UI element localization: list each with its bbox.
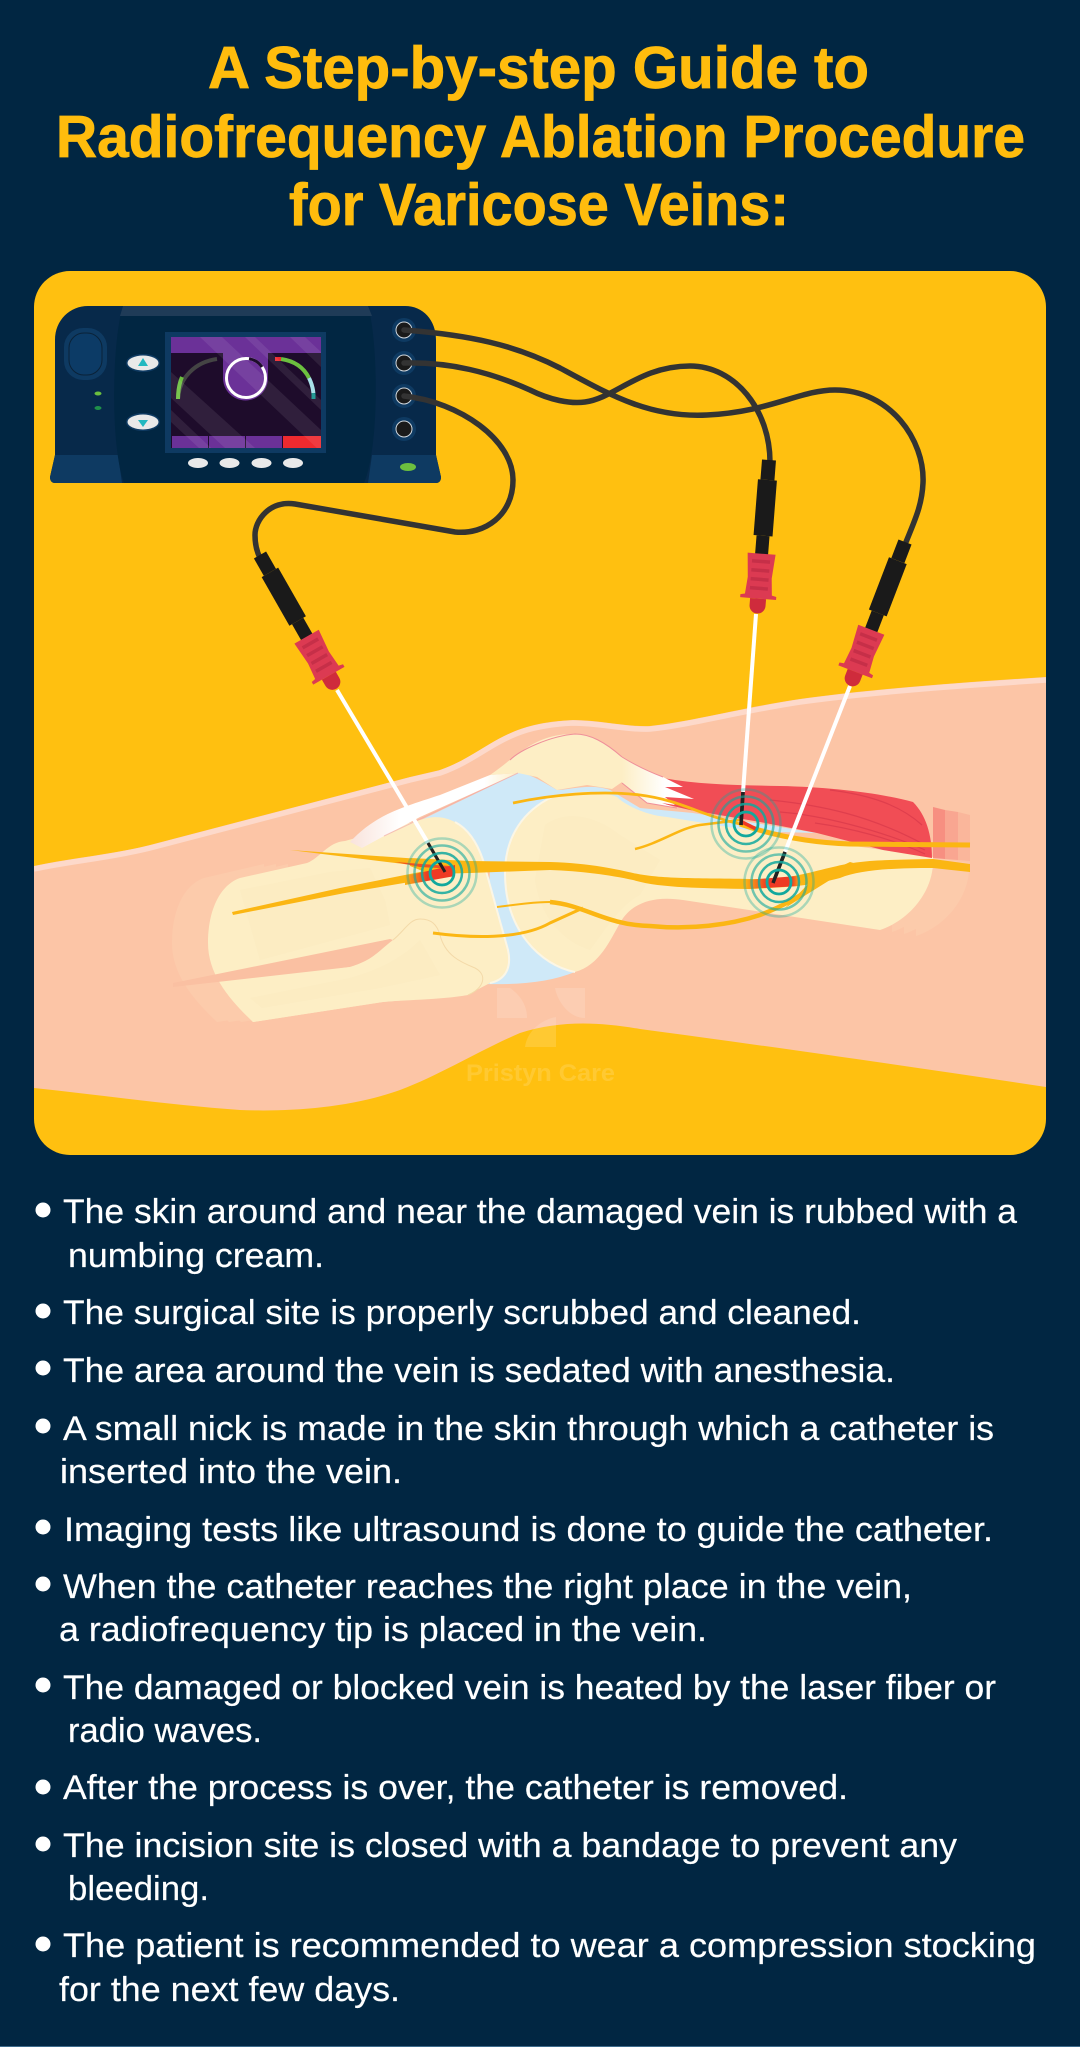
bone: fibula xyxy=(252,918,484,1022)
title: Radiofrequency Ablation Procedure xyxy=(56,104,1025,170)
step 10: for the next few days. xyxy=(59,1971,400,2009)
step 7: The damaged or blocked vein is heated by the laser fiber or xyxy=(63,1669,996,1707)
status lights xyxy=(94,392,102,410)
title: A Step-by-step Guide to xyxy=(208,35,869,101)
step 9 xyxy=(36,1827,958,1908)
step 5: Imaging tests like ultrasound is done to guide the catheter. xyxy=(64,1511,993,1549)
handle C xyxy=(838,540,912,686)
step 9: bleeding. xyxy=(68,1870,209,1908)
step 10: The patient is recommended to wear a compression stocking xyxy=(63,1927,1036,1965)
quadriceps tendon xyxy=(622,757,694,808)
patella xyxy=(490,734,622,790)
small buttons xyxy=(188,458,303,468)
synovial fluid region xyxy=(384,773,817,984)
step 1: numbing cream. xyxy=(68,1237,324,1275)
needle C xyxy=(773,686,850,883)
cables xyxy=(255,330,923,558)
screen xyxy=(165,332,326,453)
step 3: The area around the vein is sedated with anesthesia. xyxy=(63,1352,895,1390)
step 4 xyxy=(36,1410,994,1491)
heated vein segments xyxy=(395,821,800,889)
step 1: The skin around and near the damaged vein is rubbed with a xyxy=(63,1193,1018,1231)
gap between tibia and fibula xyxy=(173,939,393,987)
step 2: The surgical site is properly scrubbed and cleaned. xyxy=(63,1294,861,1332)
patellar tendon xyxy=(350,773,518,848)
rings B xyxy=(712,790,780,858)
step 7 xyxy=(36,1669,996,1750)
step 6 xyxy=(36,1568,912,1649)
watermark xyxy=(466,988,615,1087)
bone: tibia xyxy=(208,817,509,1022)
watermark: Pristyn Care xyxy=(466,1060,615,1087)
needle B xyxy=(741,614,756,825)
veins xyxy=(232,793,970,937)
step 7: radio waves. xyxy=(68,1712,262,1750)
muscle xyxy=(660,778,970,861)
step 9: The incision site is closed with a bandage to prevent any xyxy=(63,1827,958,1865)
step 6: When the catheter reaches the right place in the vein, xyxy=(63,1568,912,1606)
rings A xyxy=(408,838,476,908)
step 1 xyxy=(36,1193,1018,1275)
handle A xyxy=(254,552,344,690)
bone fade left xyxy=(172,864,288,1022)
rings C xyxy=(744,848,814,916)
title: for Varicose Veins: xyxy=(289,172,789,238)
bone: femur xyxy=(505,792,933,972)
panel: illustration xyxy=(34,271,1046,1155)
redraw needle tips over heated veins xyxy=(428,792,785,883)
step 10 xyxy=(36,1927,1036,2009)
title xyxy=(56,35,1025,238)
step 6: a radiofrequency tip is placed in the vein. xyxy=(59,1611,707,1649)
needle A xyxy=(337,690,445,872)
step 8: After the process is over, the catheter is removed. xyxy=(63,1769,848,1807)
device xyxy=(50,306,441,483)
step 4: A small nick is made in the skin through which a catheter is xyxy=(63,1410,994,1448)
step 4: inserted into the vein. xyxy=(60,1453,402,1491)
handle B xyxy=(740,460,777,614)
power button xyxy=(64,328,107,380)
indicator xyxy=(400,463,416,471)
step list xyxy=(36,1193,1036,2009)
ports xyxy=(392,318,416,441)
bone fade right xyxy=(892,852,969,936)
arrow buttons xyxy=(126,354,160,431)
leg skin xyxy=(34,677,1046,1110)
